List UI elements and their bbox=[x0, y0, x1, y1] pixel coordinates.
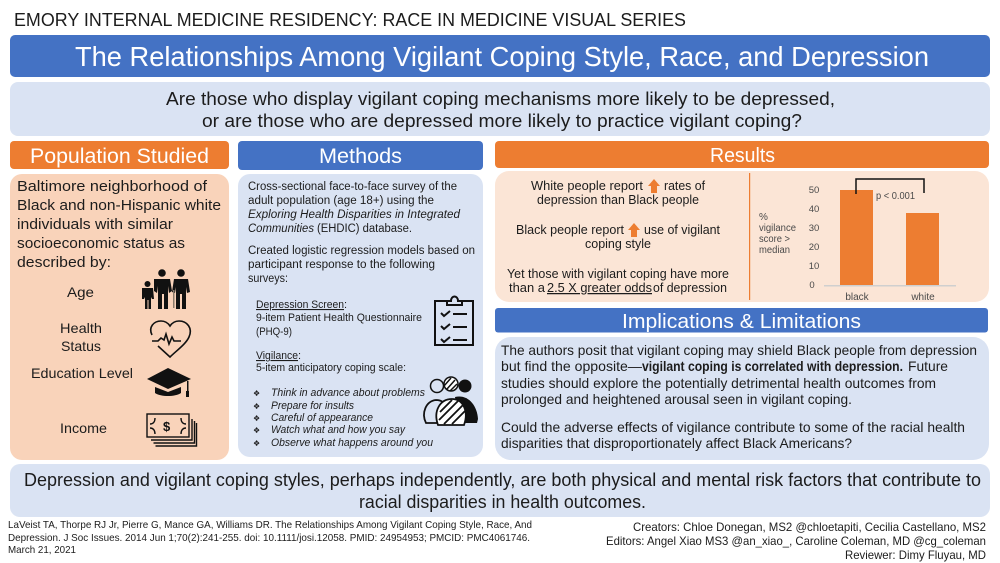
results header: Results bbox=[710, 145, 775, 167]
y axis title: score > bbox=[759, 234, 790, 245]
vigilance scale bullet list: ❖ bbox=[253, 414, 260, 423]
label: education level: Education Level bbox=[31, 365, 133, 381]
y axis title: vigilance bbox=[759, 223, 796, 234]
population description bbox=[17, 178, 221, 271]
population studied header: Population Studied bbox=[30, 145, 209, 168]
results text: depression than Black people bbox=[537, 193, 699, 207]
vigilance scale bullet list: ❖ bbox=[253, 439, 260, 448]
implications text: prolonged and heightened arousal seen in vigilant coping. bbox=[501, 391, 852, 407]
study design text: adult population (age 18+) using the bbox=[248, 195, 434, 207]
methods header: Methods bbox=[319, 145, 402, 168]
depression screen text: : bbox=[344, 299, 347, 311]
implications text: studies should explore the potentially detrimental health outcomes from bbox=[501, 375, 936, 391]
icon: graduation cap bbox=[147, 368, 191, 397]
citation: March 21, 2021 bbox=[8, 544, 76, 556]
conclusion panel bbox=[10, 464, 990, 517]
icon: up arrow bbox=[648, 179, 660, 193]
study design text: Communities bbox=[248, 223, 314, 235]
conclusion panel: Depression and vigilant coping styles, perhaps independently, are both physical and mental risk factors that contribute to bbox=[24, 470, 981, 490]
x axis labels: black bbox=[845, 292, 870, 303]
divider bbox=[749, 173, 750, 300]
vigilance scale bullet list: ❖ bbox=[253, 426, 260, 435]
depression screen text: 9-item Patient Health Questionnaire bbox=[256, 312, 422, 324]
label: age: Age bbox=[67, 284, 94, 300]
question panel bbox=[10, 82, 990, 136]
population description: described by: bbox=[17, 254, 111, 271]
citation: Depression. J Soc Issues. 2014 Jun 1;70(2):241-255. doi: 10.1111/josi.12058. PMID: 24954953; PMCID: PMC4061746. bbox=[8, 532, 530, 544]
question panel: Are those who display vigilant coping mechanisms more likely to be depressed, bbox=[166, 89, 835, 109]
methods header bbox=[238, 141, 483, 170]
population studied header bbox=[10, 141, 229, 169]
depression screen text bbox=[256, 299, 422, 338]
vigilance scale bullet list bbox=[253, 387, 433, 449]
implications header: Implications & Limitations bbox=[622, 311, 861, 333]
icon: group of people bbox=[424, 377, 478, 425]
vigilance scale bullet list: Prepare for insults bbox=[271, 400, 354, 412]
significance bracket bbox=[856, 179, 924, 194]
icon: clipboard checklist bbox=[435, 296, 473, 345]
study design text: Exploring Health Disparities in Integrated bbox=[248, 209, 461, 221]
y axis tick labels: 10 bbox=[809, 261, 819, 272]
bar chart: vigilance score bbox=[759, 179, 956, 303]
vigilance scale bullet list: Think in advance about problems bbox=[271, 387, 425, 399]
citation bbox=[8, 519, 532, 556]
results text: coping style bbox=[585, 237, 651, 251]
credits: Editors: Angel Xiao MS3 @an_xiao_, Caroline Coleman, MD @cg_coleman bbox=[606, 534, 986, 548]
study design text: Created logistic regression models based on bbox=[248, 245, 475, 257]
panel: population studied bbox=[10, 174, 229, 460]
implications text: vigilant coping is correlated with depression. bbox=[642, 358, 903, 374]
study design text: participant response to the following bbox=[248, 259, 435, 271]
label: health status: Health bbox=[60, 320, 102, 336]
panel: methods bbox=[238, 174, 483, 457]
vigilance text: Vigilance bbox=[256, 350, 298, 362]
results text: Black people report bbox=[516, 223, 625, 237]
credits: Reviewer: Dimy Fluyau, MD bbox=[845, 548, 986, 562]
label: income: Income bbox=[60, 420, 107, 436]
results text: than a bbox=[509, 281, 545, 295]
panel: implications and limitations bbox=[495, 337, 989, 460]
implications text: disparities that disproportionately affect Black Americans? bbox=[501, 435, 852, 451]
depression screen text: (PHQ-9) bbox=[256, 326, 292, 338]
results text: rates of bbox=[664, 179, 706, 193]
p value: p < 0.001 bbox=[876, 191, 915, 202]
vigilance text: : bbox=[298, 350, 301, 362]
bar: white bbox=[906, 213, 939, 285]
implications header bbox=[495, 308, 988, 333]
label: health status bbox=[60, 320, 102, 354]
implications text: Future bbox=[908, 358, 948, 374]
icon: up arrow bbox=[628, 223, 640, 237]
icon: stack of cash bbox=[147, 414, 196, 446]
vigilance scale bullet list: Careful of appearance bbox=[271, 412, 373, 424]
icon: people of different ages bbox=[142, 269, 190, 309]
icon: heart with pulse bbox=[151, 321, 190, 357]
credits bbox=[606, 520, 986, 562]
conclusion panel: racial disparities in health outcomes. bbox=[359, 492, 646, 512]
y axis title: % bbox=[759, 212, 768, 223]
vigilance scale bullet list: ❖ bbox=[253, 402, 260, 411]
series heading: EMORY INTERNAL MEDICINE RESIDENCY: RACE IN MEDICINE VISUAL SERIES bbox=[14, 10, 686, 30]
credits: Creators: Chloe Donegan, MS2 @chloetapiti, Cecilia Castellano, MS2 bbox=[633, 520, 986, 534]
label: health status: Status bbox=[61, 338, 101, 354]
y axis title: median bbox=[759, 245, 790, 256]
citation: LaVeist TA, Thorpe RJ Jr, Pierre G, Mance GA, Williams DR. The Relationships Among Vigilant Coping Style, Race, And bbox=[8, 519, 532, 531]
question panel: or are those who are depressed more likely to practice vigilant coping? bbox=[202, 111, 802, 131]
panel: results bbox=[495, 171, 989, 303]
icon: stack of cash: $ bbox=[163, 419, 171, 434]
depression screen text: Depression Screen bbox=[256, 299, 344, 311]
results text: 2.5 X greater odds bbox=[547, 281, 652, 295]
results text: Yet those with vigilant coping have more bbox=[507, 267, 729, 281]
vigilance scale bullet list: ❖ bbox=[253, 389, 260, 398]
implications text: The authors posit that vigilant coping may shield Black people from depression bbox=[501, 342, 977, 358]
title banner: The Relationships Among Vigilant Coping Style, Race, and Depression bbox=[75, 41, 929, 72]
results text: of depression bbox=[653, 281, 727, 295]
bar: black bbox=[840, 190, 873, 285]
study design text bbox=[248, 181, 475, 285]
x axis labels bbox=[845, 292, 935, 303]
vigilance scale bullet list: Observe what happens around you bbox=[271, 437, 433, 449]
y axis tick labels: 0 bbox=[809, 280, 815, 291]
y axis tick labels bbox=[809, 185, 819, 291]
vigilance text: 5-item anticipatory coping scale: bbox=[256, 362, 406, 374]
study design text: (EHDIC) database. bbox=[317, 223, 412, 235]
results text bbox=[507, 179, 729, 295]
title banner bbox=[10, 35, 990, 77]
results text: use of vigilant bbox=[644, 223, 721, 237]
study design text: Cross-sectional face-to-face survey of the bbox=[248, 181, 457, 193]
study design text: surveys: bbox=[248, 273, 288, 285]
population description: socioeconomic status as bbox=[17, 235, 185, 252]
implications text: but find the opposite— bbox=[501, 358, 642, 374]
population description: individuals with similar bbox=[17, 216, 173, 233]
vigilance text bbox=[256, 350, 406, 374]
x axis labels: white bbox=[910, 292, 935, 303]
implications text: Could the adverse effects of vigilance contribute to some of the racial health bbox=[501, 419, 965, 435]
results text: White people report bbox=[531, 179, 644, 193]
y axis title bbox=[759, 212, 796, 256]
population description: Baltimore neighborhood of bbox=[17, 178, 208, 195]
vigilance scale bullet list: Watch what and how you say bbox=[271, 424, 406, 436]
implications text bbox=[501, 342, 977, 451]
y axis tick labels: 40 bbox=[809, 204, 819, 215]
y axis tick labels: 30 bbox=[809, 223, 819, 234]
results header bbox=[495, 141, 989, 168]
y axis tick labels: 50 bbox=[809, 185, 819, 196]
y axis tick labels: 20 bbox=[809, 242, 819, 253]
population description: Black and non-Hispanic white bbox=[17, 197, 221, 214]
